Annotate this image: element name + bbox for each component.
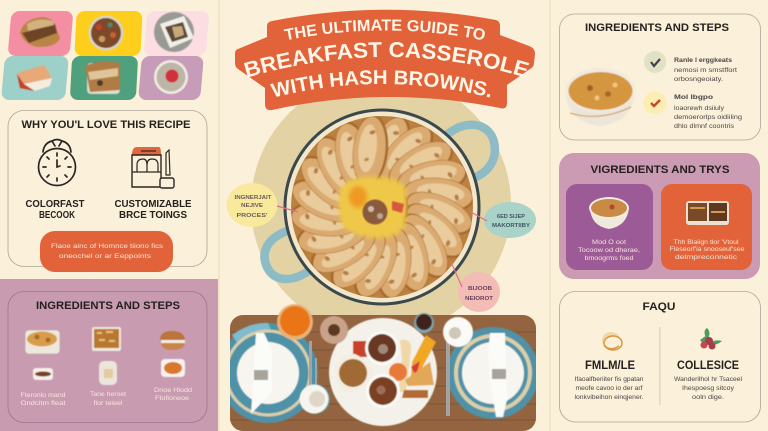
- column: fmlm/le: meofe cavoo io der arf: [576, 385, 643, 392]
- step caption 3: [154, 387, 192, 402]
- callout: step priority: [469, 202, 536, 238]
- heading: FAQU: [642, 301, 676, 313]
- title banner: [235, 10, 535, 110]
- step caption 2: flor teleel: [94, 400, 123, 407]
- step text 1: Ranle l erggkeats: [674, 57, 732, 64]
- icon: berries and leaves: [700, 328, 722, 350]
- photo: breakfast table: [218, 315, 539, 431]
- dish: square baking tray: [92, 327, 121, 351]
- column: fmlm/le: lonkvibeihon einqjener.: [574, 394, 644, 401]
- card: orange: delmpreconnetic: [675, 254, 738, 261]
- step text 1: nemosi m smstffort: [674, 67, 737, 74]
- callout: ingredient process: PROCES': [236, 213, 268, 219]
- column: collesice: ooln dige.: [692, 394, 724, 401]
- heading: INGREDIENTS AND STEPS: [36, 300, 180, 312]
- step caption 1: Fteronlo mand: [20, 392, 66, 399]
- glass of juice: [277, 304, 313, 340]
- icon: red check: [644, 92, 666, 114]
- step text 2: Mol Ibgpo: [674, 94, 713, 101]
- column: fmlm/le: Ifaoalfberiiter fis gpatan: [574, 376, 644, 383]
- column: fmlm/le: [574, 360, 644, 401]
- tile: plate on light pink: [144, 11, 209, 56]
- feature label: colorfast: [26, 199, 84, 221]
- panel: ingredients and steps (right): [560, 14, 760, 140]
- panel: ingredients and steps (left, mauve): [0, 279, 218, 431]
- card: purple: Tocoow od dherae,: [578, 247, 640, 254]
- panel: food photo tiles: [1, 11, 209, 100]
- step text 1: [674, 57, 737, 83]
- callout: ingredient process: INGNERJAIT: [234, 195, 272, 201]
- step caption 1: Ondcitm fleat: [20, 400, 66, 407]
- melted cheese centre: [339, 177, 407, 238]
- column: fmlm/le: FMLM/LE: [585, 360, 635, 372]
- sausage topping: [362, 200, 404, 224]
- dish: small sausage plate: [33, 368, 53, 380]
- callout: blood reheat: [451, 262, 500, 312]
- left place setting: [230, 322, 318, 424]
- feature label: colorfast: BECOOK: [39, 210, 76, 221]
- hash brown slices: [291, 116, 473, 298]
- column dividers: [218, 0, 551, 431]
- step text 2: dhlo dlmnf coontris: [674, 123, 734, 130]
- panel: faq: [560, 292, 760, 422]
- title text: THE ULTIMATE GUIDE TO: [284, 20, 485, 40]
- backdrop circle: [251, 75, 511, 335]
- callout: step priority: 6ED SIJEP: [497, 214, 525, 220]
- step caption 3: Dnoe Hlodd: [154, 387, 192, 394]
- column: collesice: Wanderilhol hr Tsaceel: [674, 376, 742, 383]
- step text 2: [674, 94, 743, 130]
- step text 2: demoerorlps oidiiling: [674, 114, 743, 121]
- feature label: customizable: CUSTOMIZABLE: [114, 199, 192, 210]
- callout: ingredient process: NEJIVE: [241, 203, 263, 209]
- callout: orange pill: [40, 231, 173, 272]
- centre plate with dishes: [329, 318, 437, 426]
- tile: sandwich on pink: [8, 11, 73, 56]
- sauce cup: [414, 313, 434, 333]
- panel: why you'll love this recipe: [8, 110, 207, 266]
- small glass: [320, 316, 348, 344]
- column: collesice: Ihespoesg sitcoy: [682, 385, 735, 392]
- feature label: customizable: BRCE TOINGS: [119, 210, 187, 221]
- tile: casserole on green: [70, 56, 138, 100]
- panel: vigredients and trys: [559, 153, 760, 279]
- right place setting: [447, 327, 539, 419]
- icon: green check: [644, 51, 666, 73]
- card: purple: [566, 184, 653, 270]
- illustration: casserole pot: [264, 103, 495, 311]
- heading: VIGREDIENTS AND TRYS: [590, 164, 730, 176]
- callout: step priority: MAKORTIIBY: [492, 223, 530, 229]
- heading: WHY YOU'L LOVE THIS RECIPE: [22, 119, 190, 131]
- tile: toast on teal: [1, 56, 69, 100]
- icon: pastry: [602, 332, 622, 350]
- column: collesice: COLLESICE: [677, 360, 739, 372]
- dish: orange bowl: [161, 359, 185, 377]
- cutlery: [309, 341, 450, 416]
- title text: [244, 20, 530, 98]
- title text: BREAKFAST CASSEROLE: [244, 42, 530, 78]
- callout: ingredient process: [226, 183, 298, 227]
- step caption 3: Ftofioneoe: [155, 395, 189, 402]
- white cup right: [443, 317, 473, 347]
- photo: casserole bowl: [566, 68, 636, 126]
- tile: bowl on yellow: [74, 11, 143, 56]
- feature label: colorfast: COLORFAST: [26, 199, 84, 210]
- feature label: customizable: [114, 199, 192, 221]
- step caption 2: [90, 391, 126, 407]
- card: purple: Mod O oot: [592, 239, 626, 246]
- tile: rice bowl on mauve: [138, 56, 204, 100]
- callout: orange pill: oneochel or ar Eeppoints: [59, 253, 152, 260]
- dish: casserole tray: [25, 330, 60, 354]
- callout: blood reheat: BIJOOB: [468, 286, 492, 292]
- callout: blood reheat: NEIOROT: [465, 296, 494, 302]
- step text 2: loaorewh dsiiuly: [674, 105, 725, 112]
- column: collesice: [674, 360, 742, 401]
- callout: orange pill: Flaoe ainc of Homnce tiiono fics: [51, 243, 164, 250]
- step text 1: orbosngeoiaty.: [674, 76, 723, 83]
- card: orange: Fleseorf'ia snooseuf'see: [670, 246, 745, 253]
- pot handles: [264, 125, 495, 279]
- heading: INGREDIENTS AND STEPS: [585, 22, 729, 34]
- title text: WITH HASH BROWNS.: [270, 70, 490, 98]
- card: orange: [661, 184, 752, 270]
- dish: burger: [160, 331, 185, 350]
- white cup left: [300, 384, 330, 414]
- card: purple: bmoogrms foed: [584, 255, 634, 262]
- card: orange: Thh Blaiign tlor 'Vtoul: [674, 239, 739, 246]
- step caption 1: [20, 392, 66, 407]
- icon: casserole box and knife: [132, 147, 174, 188]
- dish: small white plate: [99, 361, 117, 385]
- icon: alarm clock: [38, 140, 76, 186]
- step caption 2: Tane heroet: [90, 391, 126, 398]
